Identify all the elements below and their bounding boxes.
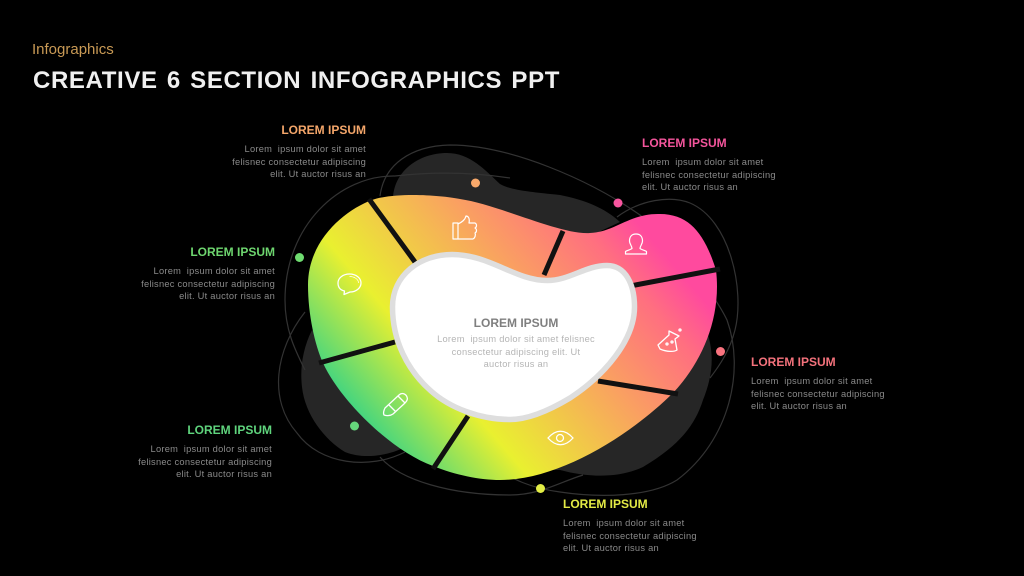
green upper heading: LOREM IPSUM <box>190 245 275 259</box>
centre body: Lorem ipsum dolor sit amet felisnec <box>437 334 595 344</box>
orange body <box>232 144 366 179</box>
callout: pink <box>642 136 776 192</box>
yellow body: felisnec consectetur adipiscing <box>563 531 697 541</box>
title: CREATIVE 6 SECTION INFOGRAPHICS PPT <box>33 67 560 94</box>
coral body: felisnec consectetur adipiscing <box>751 389 885 399</box>
pink heading: LOREM IPSUM <box>642 136 727 150</box>
segment dividers <box>319 199 720 469</box>
callout: green upper <box>141 245 275 301</box>
callout: coral <box>751 355 885 411</box>
callout: green lower <box>138 423 272 479</box>
callout: orange <box>232 123 366 179</box>
centre body: consectetur adipiscing elit. Ut <box>452 347 580 357</box>
icon: thumbs up <box>453 216 476 239</box>
yellow heading: LOREM IPSUM <box>563 497 648 511</box>
centre text <box>437 316 595 369</box>
orange heading: LOREM IPSUM <box>281 123 366 137</box>
callout: yellow <box>563 497 697 553</box>
yellow body <box>563 518 697 553</box>
centre white blob <box>392 254 634 420</box>
green upper body <box>141 266 275 301</box>
icon: pencil <box>384 394 407 416</box>
icon: user <box>626 234 646 254</box>
icon: flask <box>658 329 681 351</box>
icon: eye <box>548 431 573 445</box>
marker dots <box>295 178 725 493</box>
yellow body: elit. Ut auctor risus an <box>563 543 659 553</box>
orange body: elit. Ut auctor risus an <box>270 169 366 179</box>
coral body: elit. Ut auctor risus an <box>751 401 847 411</box>
pink body <box>642 157 776 192</box>
centre body: auctor risus an <box>484 359 548 369</box>
orange body: felisnec consectetur adipiscing <box>232 157 366 167</box>
coral body <box>751 376 885 411</box>
green lower body <box>138 444 272 479</box>
centre heading: LOREM IPSUM <box>474 316 558 330</box>
centre body <box>437 334 595 369</box>
pink body: felisnec consectetur adipiscing <box>642 170 776 180</box>
green lower heading: LOREM IPSUM <box>187 423 272 437</box>
green upper body: Lorem ipsum dolor sit amet <box>154 266 275 276</box>
coral heading: LOREM IPSUM <box>751 355 836 369</box>
pink body: Lorem ipsum dolor sit amet <box>642 157 763 167</box>
green lower body: elit. Ut auctor risus an <box>176 469 272 479</box>
green upper body: elit. Ut auctor risus an <box>179 291 275 301</box>
orange body: Lorem ipsum dolor sit amet <box>245 144 366 154</box>
orbit outlines <box>279 145 738 495</box>
segmented blob ring <box>308 195 720 480</box>
coral body: Lorem ipsum dolor sit amet <box>751 376 872 386</box>
subtitle: Infographics <box>32 41 114 58</box>
icon: speech bubble <box>338 274 361 294</box>
green lower body: Lorem ipsum dolor sit amet <box>151 444 272 454</box>
yellow body: Lorem ipsum dolor sit amet <box>563 518 684 528</box>
ring body <box>308 195 717 480</box>
green lower body: felisnec consectetur adipiscing <box>138 457 272 467</box>
green upper body: felisnec consectetur adipiscing <box>141 279 275 289</box>
dark background blobs <box>301 153 712 476</box>
pink body: elit. Ut auctor risus an <box>642 182 738 192</box>
